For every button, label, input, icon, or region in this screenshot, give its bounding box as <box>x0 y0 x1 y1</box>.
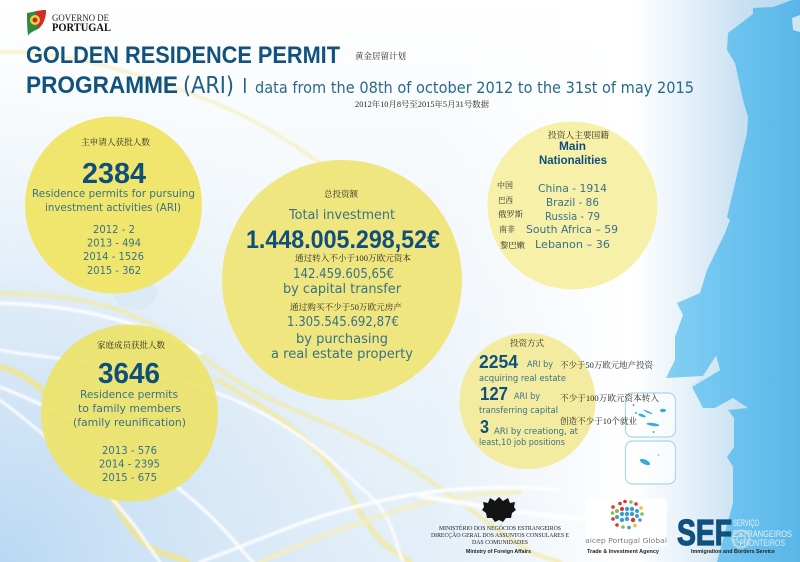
panel: main nationalities: Brazil - 86 <box>546 196 599 209</box>
panel: family members: 2013 - 576 <box>102 444 157 457</box>
panel: residence permits: 2012 - 2 <box>93 223 135 236</box>
map inset: Azores <box>626 393 676 437</box>
panel: investment types: 投资方式 <box>510 338 544 348</box>
panel: total investment: 通过转入不小于100万欧元资本 <box>295 253 411 263</box>
panel: family members: Residence permits <box>80 388 178 401</box>
title: data from the 08th of october 2012 to the 31st of may 2015 <box>255 78 694 97</box>
wordmark <box>52 14 111 34</box>
panel: total investment: by purchasing <box>296 332 388 347</box>
panel: investment types: acquiring real estate <box>479 374 566 384</box>
title: 黄金居留计划 <box>355 51 406 61</box>
panel: residence permits: 2013 - 494 <box>87 236 141 250</box>
icon: flag shield <box>27 10 46 36</box>
panel: main nationalities: Russia - 79 <box>545 210 600 223</box>
wordmark: GOVERNO DE <box>52 14 109 24</box>
panel: total investment: 142.459.605,65€ <box>293 267 394 282</box>
panel: main nationalities: 黎巴嫩 <box>500 240 525 250</box>
ministry name: MINISTÉRIO DOS NEGÓCIOS ESTRANGEIROS <box>439 524 561 532</box>
panel: investment types: 不少于100万欧元资本转入 <box>560 393 659 403</box>
logo: SEF: SEF <box>677 512 732 553</box>
logo: SEF: E FRONTEIROS <box>733 538 785 548</box>
logo: Governo de Portugal <box>27 10 111 36</box>
panel: total investment: 1.448.005.298,52€ <box>246 226 440 254</box>
title: GOLDEN RESIDENCE PERMIT <box>26 42 340 69</box>
title: (ARI) <box>183 73 234 99</box>
panel: residence permits: 2384 <box>82 158 146 190</box>
panel: residence permits: 2015 - 362 <box>87 264 141 277</box>
panel: total investment: 通过购买不少于50万欧元房产 <box>290 302 402 312</box>
panel: residence permits: Residence permits for pursuing <box>32 187 195 200</box>
panel: main nationalities: South Africa – 59 <box>526 223 618 236</box>
logo: aicep Portugal Global <box>585 499 667 555</box>
logo: Ministry of Foreign Affairs <box>431 497 569 555</box>
title: 2012年10月8号至2015年5月31号数据 <box>355 99 489 109</box>
ministry name: DAS COMUNIDADES <box>472 540 528 546</box>
panel: family members <box>41 324 218 502</box>
panel: total investment: 总投资额 <box>324 189 358 199</box>
icon: dot sphere <box>611 500 644 529</box>
title <box>26 42 694 109</box>
panel: total investment: by capital transfer <box>283 282 402 297</box>
panel: total investment <box>222 160 462 400</box>
panel: investment types: 创造不少于10个就业 <box>560 416 637 426</box>
panel: investment types: transferring capital <box>479 406 558 416</box>
panel: main nationalities: Lebanon – 36 <box>535 238 610 251</box>
logo: SEF: Immigration and Borders Service <box>691 549 775 555</box>
panel: investment types: 2254 <box>479 351 519 372</box>
panel: family members: 家庭成员获批人数 <box>97 340 165 350</box>
logo: aicep Portugal Global: Trade & Investment Agency <box>587 549 660 555</box>
map inset: Madeira <box>626 441 676 484</box>
panel: family members: (family reunification) <box>73 416 186 429</box>
panel: main nationalities: 巴西 <box>498 196 513 205</box>
panel: main nationalities: 中国 <box>497 180 513 190</box>
panel: investment types <box>460 333 659 469</box>
panel: main nationalities: 俄罗斯 <box>498 209 523 219</box>
panel: investment types: 不少于50万欧元地产投资 <box>560 360 653 370</box>
title: PROGRAMME <box>26 72 178 99</box>
panel: residence permits: 主申请人获批人数 <box>81 137 150 147</box>
logo: SEF: SERVIÇO <box>733 518 759 528</box>
logo: aicep Portugal Global: aicep Portugal Global <box>585 537 667 545</box>
icon: emblem <box>482 497 516 522</box>
panel: total investment: 1.305.545.692,87€ <box>287 315 399 330</box>
panel: main nationalities: Nationalities <box>539 155 607 167</box>
wordmark: PORTUGAL <box>52 22 111 34</box>
map: Portuguese coast <box>666 0 800 562</box>
ministry name <box>431 524 569 555</box>
panel: family members: 2015 - 675 <box>102 471 157 484</box>
ministry name: DIRECÇÃO GERAL DOS ASSUNTOS CONSULARES E <box>431 531 569 539</box>
panel: investment types: ARI by <box>514 392 540 402</box>
panel: family members: 3646 <box>98 358 160 390</box>
panel: main nationalities: 南非 <box>499 224 515 234</box>
panel: residence permits: investment activities (ARI) <box>45 201 181 214</box>
panel: main nationalities: China - 1914 <box>538 182 607 195</box>
panel: investment types: ARI by creationg, at <box>494 427 579 437</box>
logo: SEF <box>677 512 792 555</box>
ministry name: Ministry of Foreign Affairs <box>466 549 531 555</box>
panel: total investment: Total investment <box>288 207 395 223</box>
panel: main nationalities: Main <box>559 141 586 153</box>
panel: family members: to family members <box>78 402 181 415</box>
panel: total investment: a real estate property <box>271 347 413 362</box>
panel: investment types: 3 <box>480 416 489 437</box>
panel: residence permits: 2014 - 1526 <box>83 250 144 263</box>
panel: main nationalities <box>488 122 658 290</box>
panel: main nationalities: 投资人主要国籍 <box>548 130 609 140</box>
panel: investment types: 127 <box>480 383 508 404</box>
panel: family members: 2014 - 2395 <box>99 458 160 470</box>
panel: investment types: ARI by <box>527 360 553 370</box>
panel: residence permits <box>25 116 202 294</box>
panel: investment types: least,10 job positions <box>479 438 566 448</box>
